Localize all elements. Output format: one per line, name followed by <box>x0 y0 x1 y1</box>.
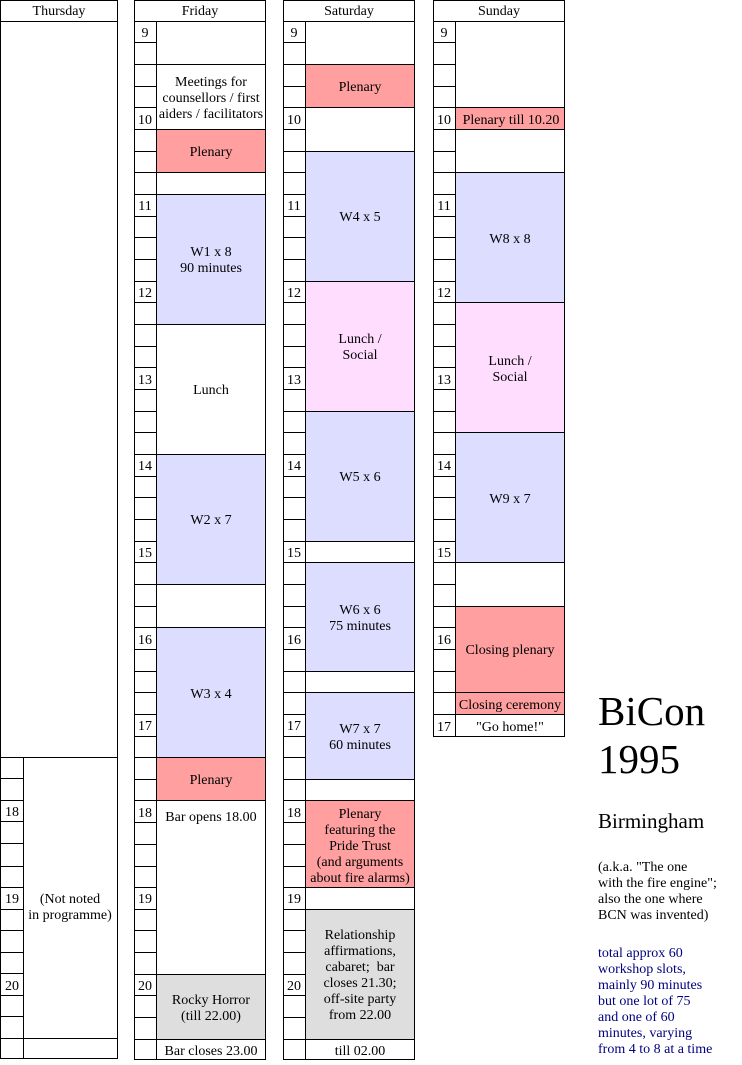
cell: meetings: aiders / facilitators <box>159 107 263 122</box>
cell: empty morning <box>306 22 414 64</box>
cell: bar opens: Bar opens 18.00 <box>165 810 257 825</box>
cell: relationship affirmations: affirmations, <box>324 944 396 959</box>
time column: Thursday: 20 <box>5 979 19 994</box>
cell: break <box>306 108 414 152</box>
cell: lunch and social: Lunch / <box>488 354 532 369</box>
cell: closing ceremony: Closing ceremony <box>459 698 561 713</box>
time column: Saturday: 12 <box>287 286 301 301</box>
cell: plenary with Pride Trust: Plenary <box>339 807 381 822</box>
cell: meetings <box>156 64 266 130</box>
cell: W8: W8 x 8 <box>489 232 531 247</box>
cell: Rocky Horror: (till 22.00) <box>181 1009 241 1024</box>
cell: plenary till 10.20: Plenary till 10.20 <box>463 113 559 128</box>
heading: Thursday <box>0 0 118 22</box>
time column: Saturday: 20 <box>287 979 301 994</box>
text block: workshop totals: from 4 to 8 at a time <box>598 1042 712 1057</box>
time column: Sunday: 10 <box>437 113 451 128</box>
time column: Friday: 12 <box>138 286 152 301</box>
cell: plenary with Pride Trust: (and arguments <box>317 855 403 870</box>
cell: relationship affirmations: from 22.00 <box>329 1008 391 1023</box>
cell: W8 <box>456 172 564 302</box>
time column: Friday: 18 <box>138 806 152 821</box>
cell: W7 <box>306 692 414 780</box>
time column: Friday: 9 <box>142 26 148 41</box>
cell: break <box>306 888 414 910</box>
heading: Friday <box>134 0 266 22</box>
cell: W4 <box>306 152 414 282</box>
time column: Sunday: 17 <box>437 720 451 735</box>
time column: Saturday: 10 <box>287 113 301 128</box>
heading: Sunday <box>434 0 564 22</box>
time column: Saturday: 16 <box>287 633 301 648</box>
cell: break <box>456 130 564 172</box>
cell: plenary with Pride Trust <box>306 800 414 888</box>
cell: W3 <box>156 628 266 758</box>
cell: break <box>306 542 414 562</box>
cell: go home <box>456 714 564 736</box>
cell: relationship affirmations: cabaret; bar <box>325 960 395 975</box>
empty block before evening <box>0 22 118 758</box>
cell: till 02.00: till 02.00 <box>335 1044 385 1059</box>
cell: meetings: Meetings for <box>175 75 247 90</box>
cell: relationship affirmations <box>306 910 414 1040</box>
cell: go home: "Go home!" <box>476 720 544 735</box>
text block: a.k.a. note: (a.k.a. "The one <box>598 860 687 875</box>
cell: W4: W4 x 5 <box>339 210 381 225</box>
cell: W7: 60 minutes <box>329 738 391 753</box>
text block: a.k.a. note: BCN was invented) <box>598 908 709 923</box>
cell: meetings: counsellors / first <box>162 91 260 106</box>
time column: Saturday: 18 <box>287 806 301 821</box>
cell: W9: W9 x 7 <box>489 492 531 507</box>
time column: Friday: 14 <box>138 459 152 474</box>
cell: relationship affirmations: closes 21.30; <box>323 976 397 991</box>
text block: a.k.a. note: with the fire engine"; <box>598 876 717 891</box>
cell: plenary: Plenary <box>190 145 232 160</box>
time column: Thursday: 19 <box>5 892 19 907</box>
cell: break <box>306 780 414 800</box>
cell: W6 <box>306 562 414 672</box>
cell: lunch and social: Social <box>492 370 528 385</box>
heading: Friday: Friday <box>182 4 218 19</box>
cell: plenary with Pride Trust: about fire alarms) <box>310 871 410 886</box>
cell: W5 <box>306 412 414 542</box>
time column: Sunday <box>433 22 456 736</box>
time column: Friday: 16 <box>138 633 152 648</box>
cell: W1: W1 x 8 <box>190 245 232 260</box>
cell: relationship affirmations: Relationship <box>325 928 395 943</box>
cell: plenary till 10.20 <box>456 108 564 130</box>
cell: bar closes: Bar closes 23.00 <box>165 1044 257 1059</box>
cell: lunch and social <box>306 282 414 412</box>
cell: W1 <box>156 194 266 324</box>
panel: Thursday column <box>0 0 118 1058</box>
cell: not noted in programme <box>24 758 118 1038</box>
title: BiCon 1995: BiCon <box>598 688 705 734</box>
panel: Friday column <box>134 0 266 1060</box>
time column: Saturday: 13 <box>287 373 301 388</box>
cell: plenary <box>306 64 414 108</box>
cell: W6: 75 minutes <box>329 619 391 634</box>
text block: workshop totals: but one lot of 75 <box>598 994 691 1009</box>
cell: break <box>306 672 414 692</box>
time column: Saturday: 17 <box>287 719 301 734</box>
time column: Saturday <box>283 22 306 1060</box>
panel: Sunday column <box>433 0 564 736</box>
cell: lunch: Lunch <box>193 383 229 398</box>
cell: lunch and social: Social <box>342 348 378 363</box>
text block: workshop totals: and one of 60 <box>598 1010 675 1025</box>
cell: plenary: Plenary <box>339 80 381 95</box>
cell: plenary with Pride Trust: Pride Trust <box>329 839 391 854</box>
heading: Saturday: Saturday <box>324 4 374 19</box>
cell: break <box>156 584 266 628</box>
cell: not noted in programme: in programme) <box>28 908 112 923</box>
time column: Friday: 20 <box>138 979 152 994</box>
cell: till 02.00 <box>306 1040 414 1060</box>
cell: Thursday end <box>24 1038 118 1058</box>
cell: W5: W5 x 6 <box>339 470 381 485</box>
text block: workshop totals: total approx 60 <box>598 946 683 961</box>
cell: lunch and social: Lunch / <box>338 332 382 347</box>
time column: Saturday: 14 <box>287 459 301 474</box>
time column: Sunday: 9 <box>440 26 448 41</box>
cell: closing plenary: Closing plenary <box>465 643 555 658</box>
heading: Sunday: Sunday <box>478 4 520 19</box>
cell: empty morning <box>456 22 564 108</box>
title: BiCon 1995: 1995 <box>598 736 680 782</box>
subtitle: Birmingham: Birmingham <box>598 809 704 833</box>
cell: plenary <box>156 130 266 172</box>
cell: W9 <box>456 432 564 562</box>
cell: lunch <box>156 324 266 454</box>
text block: workshop totals: minutes, varying <box>598 1026 692 1041</box>
time column: Friday <box>134 22 156 1060</box>
panel: Saturday column <box>283 0 414 1060</box>
time column: Friday: 15 <box>138 546 152 561</box>
time column: Friday: 10 <box>138 113 152 128</box>
time column: Thursday: 18 <box>5 805 19 820</box>
heading: Saturday <box>284 0 414 22</box>
cell: lunch and social <box>456 302 564 432</box>
cell: bar closes <box>156 1040 266 1060</box>
cell: plenary with Pride Trust: featuring the <box>324 823 396 838</box>
cell: plenary: Plenary <box>190 773 232 788</box>
cell: bar opens <box>156 800 266 974</box>
cell: empty morning <box>156 22 266 64</box>
time column: Friday: 19 <box>138 892 152 907</box>
time column: Friday: 17 <box>138 719 152 734</box>
text block: workshop totals: workshop slots, <box>598 962 686 977</box>
cell: W7: W7 x 7 <box>339 722 381 737</box>
cell: closing ceremony <box>456 692 564 714</box>
cell: W6: W6 x 6 <box>339 603 381 618</box>
cell: not noted in programme: (Not noted <box>40 892 100 907</box>
time column: Sunday: 12 <box>437 286 451 301</box>
text block: a.k.a. note <box>598 860 717 923</box>
time column: Friday: 11 <box>138 199 152 214</box>
cell: plenary <box>156 758 266 800</box>
cell: Rocky Horror <box>156 974 266 1040</box>
time column: Sunday: 16 <box>437 633 451 648</box>
time column: Sunday: 15 <box>437 546 451 561</box>
title: BiCon 1995 <box>598 688 705 782</box>
time column: Sunday: 14 <box>437 459 451 474</box>
text block: workshop totals: mainly 90 minutes <box>598 978 702 993</box>
cell: W3: W3 x 4 <box>190 687 232 702</box>
time column: Sunday: 11 <box>437 199 451 214</box>
text block: workshop totals <box>598 946 712 1057</box>
time column: Saturday: 19 <box>287 892 301 907</box>
time column: Sunday: 13 <box>437 373 451 388</box>
time column: Thursday <box>0 758 24 1058</box>
cell: break <box>156 172 266 194</box>
text block: a.k.a. note: also the one where <box>598 892 703 907</box>
time column: Saturday: 11 <box>287 199 301 214</box>
cell: W1: 90 minutes <box>180 261 242 276</box>
cell: break <box>456 562 564 606</box>
cell: W2 <box>156 454 266 584</box>
cell: W2: W2 x 7 <box>190 513 232 528</box>
cell: Rocky Horror: Rocky Horror <box>172 993 250 1008</box>
cell: closing plenary <box>456 606 564 692</box>
heading: Thursday: Thursday <box>33 4 85 19</box>
cell: relationship affirmations: off-site party <box>324 992 396 1007</box>
time column: Saturday: 15 <box>287 546 301 561</box>
time column: Friday: 13 <box>138 373 152 388</box>
time column: Saturday: 9 <box>290 26 298 41</box>
